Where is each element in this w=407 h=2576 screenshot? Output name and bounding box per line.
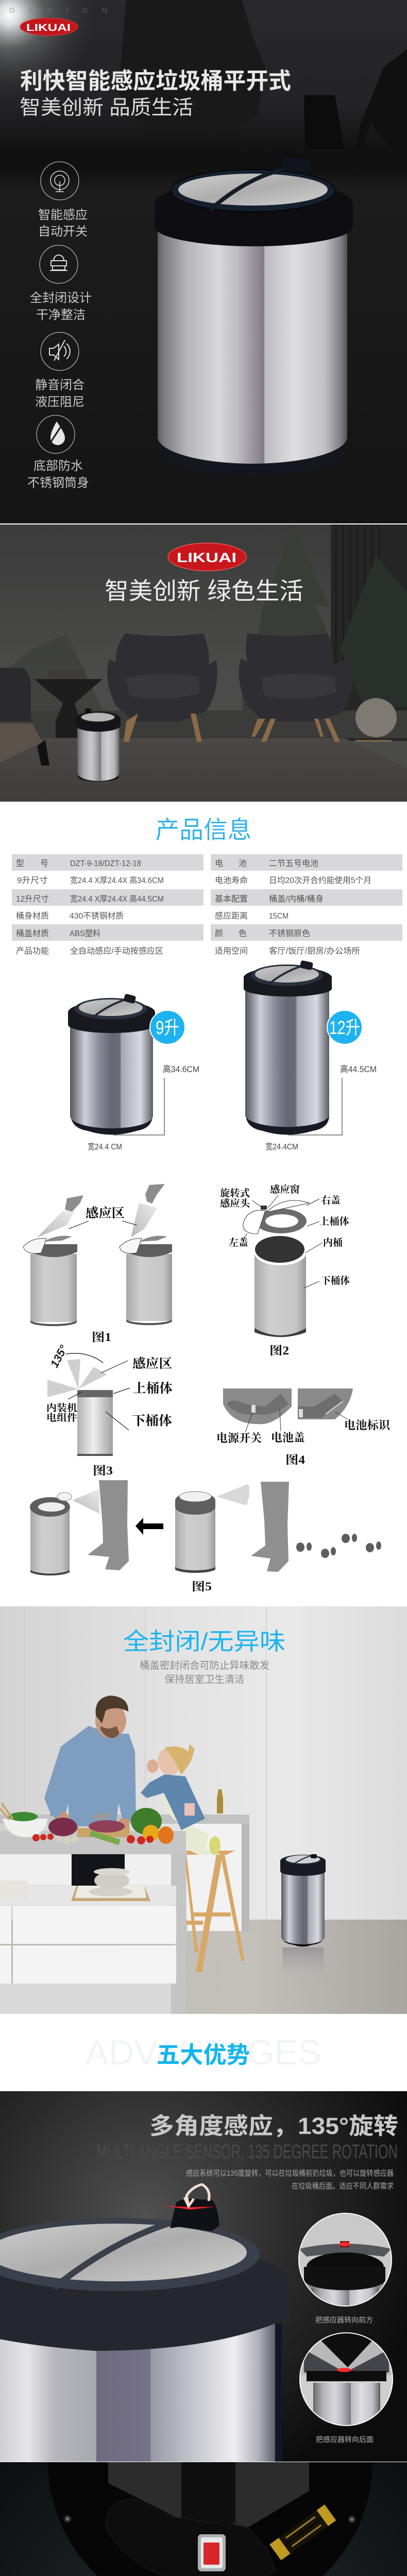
left legs — [88, 1480, 129, 1570]
label: sealed: 干净整洁 — [36, 308, 86, 322]
diagram: figure 3: 下桶体 — [132, 1414, 172, 1428]
labels: 感应头 — [220, 1197, 251, 1209]
panel: five advantages header — [85, 2033, 321, 2072]
radish mound — [89, 1820, 125, 1833]
right closed bin — [175, 1504, 215, 1570]
stool — [184, 1851, 245, 1972]
leaders — [245, 1409, 348, 1432]
inner barrel — [255, 1236, 304, 1263]
icon: sealed lock — [40, 245, 78, 283]
girl — [141, 1744, 222, 1855]
lid ring — [0, 2218, 260, 2291]
detail circle: back — [300, 2333, 393, 2427]
bin lid — [171, 170, 335, 212]
spec table left: 桶盖材质 — [16, 929, 49, 938]
leaders — [241, 1195, 323, 1288]
diagram: figure 3: 上桶体 — [133, 1381, 173, 1396]
sofa — [0, 668, 49, 766]
label: sensing — [38, 208, 88, 239]
right lid — [268, 1200, 309, 1212]
label: silent: 液压阻尼 — [35, 395, 84, 409]
spec table left: 12升尺寸 — [16, 894, 49, 904]
12L bin dimension lines — [289, 1078, 342, 1135]
spec table right: 感应距离 — [215, 911, 248, 921]
diagram: figure 3: 内装机 — [46, 1402, 77, 1414]
figure label: 图2 — [269, 1344, 289, 1357]
wall — [0, 1606, 407, 1921]
footprints — [296, 1534, 381, 1558]
spec table right — [211, 854, 402, 956]
hero background — [0, 0, 407, 523]
bin base ring — [159, 435, 346, 477]
labels: 电池标识 — [344, 1419, 391, 1432]
peppers — [143, 1825, 159, 1841]
spec table right: 二节五号电池 — [269, 859, 318, 868]
bin black rim — [155, 181, 353, 246]
logo: LIKUAI — [20, 18, 78, 36]
sensing fans — [47, 1359, 107, 1397]
left cone and hand — [37, 1211, 74, 1238]
lid split — [54, 2222, 175, 2287]
product: 12L bin — [244, 960, 332, 1134]
spec table left: 产品功能 — [16, 946, 49, 956]
spec table left — [12, 854, 204, 956]
width label 12L: 宽24.4CM — [265, 1142, 298, 1151]
post — [171, 1854, 186, 2014]
spec table left: 9升尺寸 — [17, 876, 48, 885]
background — [0, 2014, 407, 2091]
label: waterproof — [27, 459, 89, 490]
lamp — [355, 698, 397, 741]
spec table left: ABS塑料 — [70, 929, 100, 938]
armchair left — [107, 633, 217, 742]
detail circle: front — [299, 2213, 392, 2308]
spec table right: 15CM — [269, 912, 289, 921]
salad — [9, 1812, 38, 1821]
spec table left: 全自动感应/手动按感应区 — [70, 946, 163, 956]
tree silhouettes — [0, 526, 335, 711]
dark edge — [275, 2318, 282, 2462]
bin steel body — [158, 227, 347, 464]
angle label: 135° — [48, 1343, 70, 1370]
slogan: 智美创新 绿色生活 — [105, 578, 303, 604]
red beam — [162, 2206, 216, 2210]
wall panel joints — [25, 1606, 266, 1920]
spec table left: 桶身材质 — [16, 911, 49, 921]
arrow — [135, 1518, 163, 1535]
lid split — [210, 170, 282, 210]
under lid right — [298, 1388, 353, 1419]
steel body — [0, 2313, 275, 2462]
light glare — [0, 0, 124, 108]
lid plate — [0, 2224, 247, 2281]
spec table left: 宽24.4 X厚24.4X 高34.6CM — [70, 876, 164, 885]
hand — [147, 1759, 158, 1773]
label: silent — [35, 378, 84, 409]
mushrooms — [56, 1836, 78, 1844]
label: sensing: 智能感应 — [38, 208, 88, 222]
faint header text: DESIGN — [9, 6, 107, 14]
labels: 下桶体 — [321, 1275, 350, 1286]
spec table right: 电池寿命 — [215, 876, 248, 885]
spec table right: 日均20次开合约能使用5个月 — [269, 876, 371, 885]
diagram: figure 4 — [216, 1388, 391, 1466]
9L bin dimension lines — [113, 1078, 164, 1135]
plinth — [0, 1984, 171, 2014]
front counter — [0, 1831, 186, 2014]
screws — [64, 2516, 355, 2576]
spec table right: 适用空间 — [215, 946, 248, 956]
upper body — [77, 1390, 113, 1397]
background armchair left — [118, 0, 265, 134]
spec table right: 电 — [215, 859, 223, 868]
vegetables — [0, 1803, 174, 1844]
bottle — [217, 1789, 223, 1814]
heading: 多角度感应，135°旋转 — [149, 2113, 398, 2139]
curtain — [331, 524, 407, 741]
logo: LIKUAI large — [168, 543, 246, 571]
left open bin — [30, 1507, 70, 1573]
figure label: 图4 — [285, 1453, 306, 1466]
spec table right: 不锈钢原色 — [269, 929, 310, 938]
trousers — [72, 1850, 125, 1886]
right legs — [251, 1482, 289, 1572]
heading: 产品信息 — [156, 816, 251, 843]
spec table left: 430不锈钢材质 — [70, 911, 124, 921]
width label 9L: 宽24.4 CM — [88, 1142, 122, 1151]
back counter — [0, 1815, 249, 1932]
labels: 电池盖 — [271, 1431, 305, 1444]
diagram: figure 1 — [23, 1184, 172, 1344]
shelf — [0, 1886, 176, 1905]
title: 利快智能感应垃圾桶平开式 — [20, 69, 291, 94]
pot — [0, 1880, 28, 1900]
rotation arrow — [184, 2184, 209, 2206]
right sensing bin — [126, 1254, 172, 1321]
lower body — [77, 1397, 113, 1456]
figure label: 图5 — [192, 1580, 212, 1593]
sense zone label: 感应区 — [86, 1206, 125, 1221]
diagram: figure 3: 电组件 — [46, 1412, 77, 1423]
beard — [100, 1726, 120, 1738]
product: large bin close-up — [0, 2184, 290, 2462]
spec table left: DZT-9-18/DZT-12-18 — [70, 859, 141, 868]
labels: 电源开关 — [216, 1432, 262, 1445]
icon: silent — [41, 332, 79, 370]
badge: 9L — [150, 1010, 185, 1044]
face — [158, 1747, 182, 1775]
lettuce — [131, 1808, 162, 1835]
plant — [340, 556, 407, 711]
sensor head — [170, 2199, 219, 2231]
black rim — [0, 2242, 290, 2351]
labels: 右盖 — [321, 1195, 341, 1206]
left cone — [73, 1489, 99, 1514]
icon: waterproof — [37, 415, 75, 453]
description — [140, 1660, 269, 1685]
panel: sealed no odour kitchen — [0, 1606, 407, 2014]
labels: 感应窗 — [270, 1183, 300, 1195]
dress — [161, 1788, 222, 1855]
reflection — [282, 1947, 324, 1984]
spec table right: 色 — [239, 929, 247, 938]
rug — [0, 738, 407, 802]
product: kitchen bin — [280, 1854, 326, 1984]
white shelf back — [0, 1854, 72, 1885]
background — [0, 2462, 407, 2576]
figure label: 图3 — [93, 1464, 113, 1477]
product: 9L bin — [68, 993, 155, 1134]
hair — [96, 1696, 128, 1723]
drawers — [0, 1906, 176, 1984]
label: sealed — [30, 291, 92, 322]
background armchair right — [351, 49, 407, 170]
diagram: figure 5 — [30, 1480, 381, 1593]
labels: 上桶体 — [319, 1216, 349, 1227]
spec table right: 颜 — [215, 929, 223, 938]
armchair right — [239, 633, 352, 742]
grey window — [108, 2462, 309, 2527]
labels: 旋转式 — [220, 1188, 250, 1199]
height label 9L: 高34.6CM — [163, 1064, 199, 1074]
switch — [198, 2534, 226, 2571]
background — [0, 802, 407, 1606]
spec table left: 号 — [40, 859, 48, 868]
label: silent: 静音闭合 — [35, 378, 84, 392]
caption: back: 把感应器转向后面 — [316, 2435, 374, 2444]
arms — [56, 1811, 130, 1850]
skirting and floor — [0, 710, 407, 738]
icon: sensing — [41, 162, 79, 200]
shoe — [209, 1836, 221, 1855]
small bin — [76, 708, 121, 782]
watermark: ADVANTAGES — [85, 2033, 321, 2072]
subtitle: 智美创新 品质生活 — [20, 97, 193, 119]
background — [0, 2091, 407, 2462]
board — [77, 1828, 130, 1837]
labels: 左盖 — [229, 1237, 248, 1248]
head — [95, 1703, 126, 1738]
spoon handles — [0, 1803, 13, 1820]
right cone — [216, 1484, 249, 1505]
heading: 全封闭/无异味 — [123, 1628, 285, 1655]
description: 在垃圾桶后面。适应不同人群需求 — [292, 2181, 394, 2191]
badge: 12L — [327, 1010, 362, 1044]
spec table right: 池 — [239, 859, 247, 868]
sensor head — [261, 1206, 267, 1210]
label: waterproof: 不锈钢筒身 — [27, 476, 89, 490]
caption: front: 把感应器转向前方 — [315, 2316, 373, 2324]
wall — [0, 524, 407, 802]
sensor head — [282, 156, 311, 174]
heading: 五大优势 — [157, 2042, 250, 2068]
label: waterproof: 底部防水 — [33, 459, 83, 473]
logo: LIKUAI: LIKUAI — [26, 23, 71, 33]
floor — [0, 1920, 407, 2014]
cardigan — [141, 1774, 205, 1830]
diagram: figure 3 — [46, 1343, 173, 1477]
centre rail — [181, 2462, 235, 2523]
knife — [90, 1812, 111, 1820]
diagram: figure 2 — [220, 1183, 350, 1357]
spec table left: 型 — [16, 859, 24, 868]
man — [44, 1696, 136, 1886]
stripe pocket — [184, 1803, 195, 1816]
batteries — [269, 2504, 336, 2561]
background side table — [304, 95, 344, 149]
bowl — [3, 1819, 48, 1837]
under lid left — [223, 1388, 292, 1424]
sense zone leaders — [69, 1221, 137, 1229]
logo: LIKUAI large: LIKUAI — [177, 550, 236, 565]
rotation arc — [66, 1353, 103, 1363]
tray and plates — [71, 1868, 150, 1901]
tomatoes — [32, 1834, 154, 1844]
panel: hero — [0, 0, 407, 523]
spec table right: 基本配置 — [215, 894, 248, 904]
description — [186, 2168, 394, 2191]
leaders — [68, 1361, 130, 1430]
spec table left: 宽24.4 X厚24.4X 高44.5CM — [70, 894, 164, 904]
spec table right: 桶盖/内桶/桶身 — [269, 894, 324, 904]
panel: low power — [0, 2462, 407, 2576]
counter top — [0, 1831, 186, 1854]
spec table right: 客厅/饭厅/厨房/办公场所 — [269, 946, 360, 956]
upper ring — [255, 1209, 307, 1233]
labels — [216, 1419, 391, 1445]
lower body — [255, 1253, 306, 1337]
lid underside — [48, 2462, 372, 2576]
curtain folds — [335, 524, 380, 679]
tap — [52, 1795, 63, 1816]
badge: 12L: 12升 — [329, 1017, 360, 1038]
panel: multi-angle sensor — [0, 2091, 407, 2462]
label: sensing: 自动开关 — [38, 225, 88, 239]
description: 桶盖密封闭合可防止异味散发 — [140, 1660, 269, 1671]
panel: living room brand — [0, 524, 407, 802]
sweater — [44, 1726, 136, 1826]
radicchio — [48, 1818, 77, 1836]
badge: 9L: 9升 — [156, 1017, 179, 1038]
labels: 感应区 — [132, 1356, 172, 1371]
height label 12L: 高44.5CM — [340, 1064, 377, 1074]
hair — [165, 1744, 195, 1775]
left sensing bin — [30, 1254, 77, 1322]
left lid — [243, 1210, 265, 1234]
description: 保持居室卫生清洁 — [164, 1674, 245, 1685]
label: sealed: 全封闭设计 — [30, 291, 92, 305]
panel: product info — [12, 816, 402, 1593]
labels: 内桶 — [323, 1237, 343, 1248]
asparagus — [90, 1833, 120, 1842]
figure label: 图1 — [92, 1331, 111, 1344]
right cone and hand — [131, 1203, 157, 1238]
side table — [34, 670, 103, 738]
battery cover — [106, 2499, 276, 2576]
labels — [220, 1183, 350, 1286]
product: trash bin — [155, 156, 353, 477]
